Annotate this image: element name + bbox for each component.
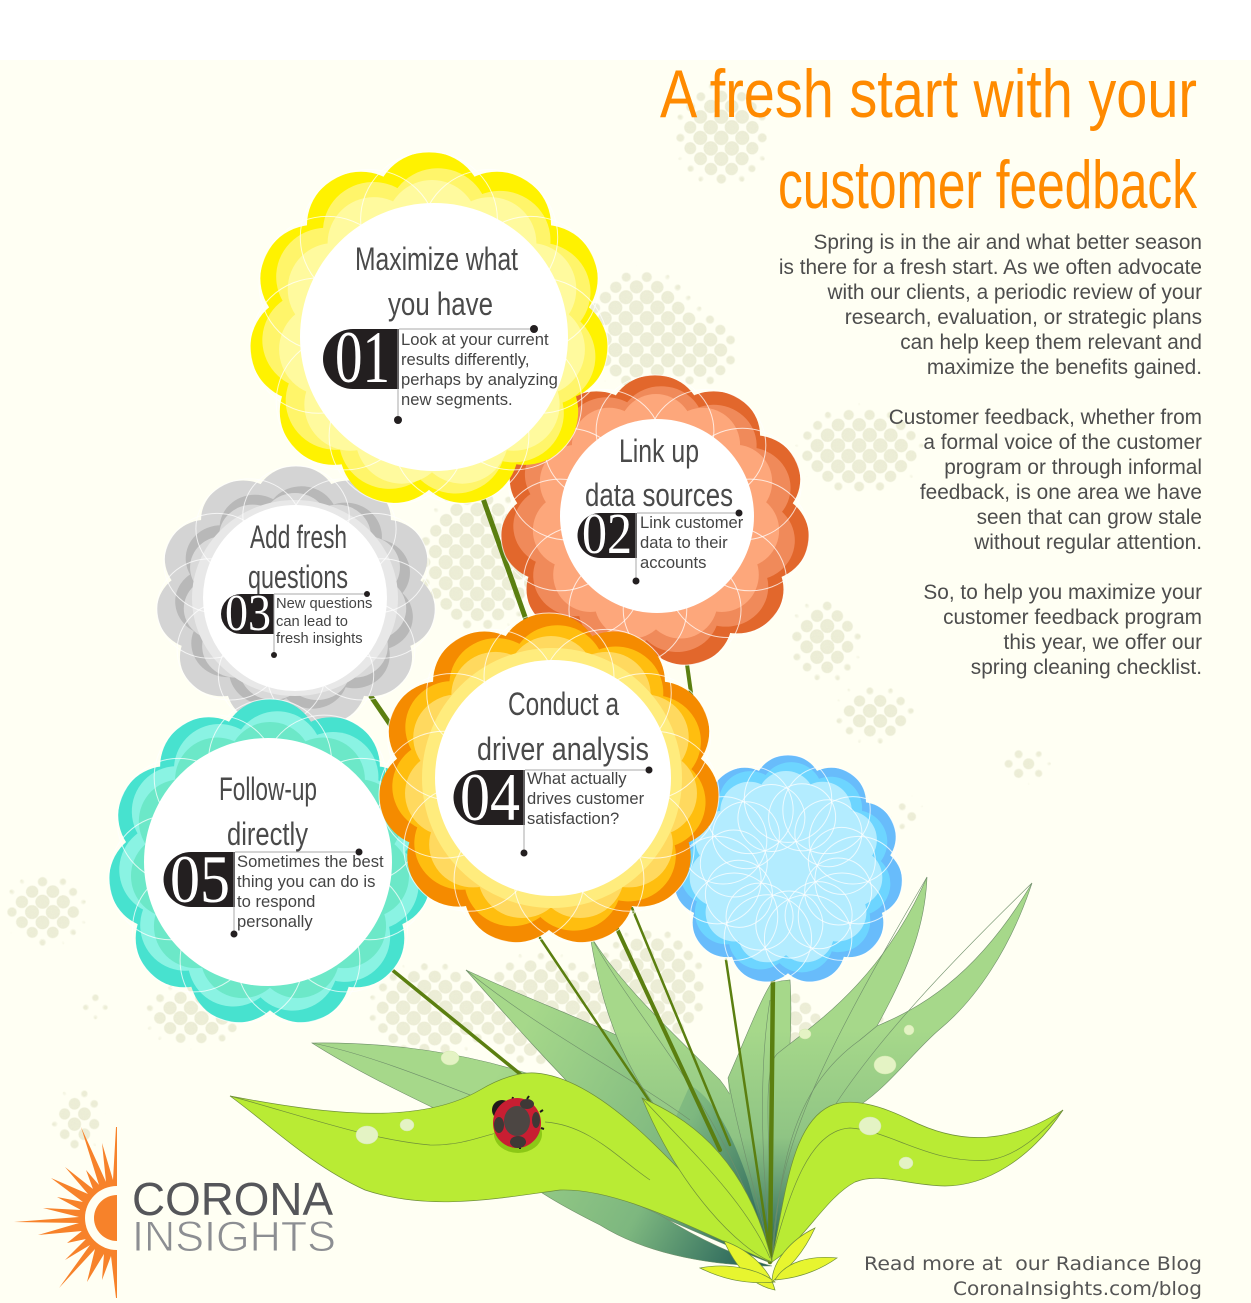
paragraph 3: So, to help you maximize your: [923, 581, 1202, 604]
number badge 01: 01: [335, 317, 390, 399]
paragraph 1: with our clients, a periodic review of your: [826, 281, 1202, 304]
paragraph 2: without regular attention.: [973, 531, 1202, 554]
illustration: back leaves: [312, 877, 1032, 1266]
description 01: Look at your current: [401, 330, 549, 349]
flower: blue empty bloom: [674, 755, 902, 982]
white disc 02: [560, 419, 754, 613]
description 02: accounts: [640, 553, 706, 572]
paragraph 3: [923, 581, 1202, 679]
paragraph 2: a formal voice of the customer: [923, 431, 1202, 454]
description 03: fresh insights: [276, 631, 363, 647]
number badge 04: 04: [460, 759, 520, 835]
connector 03: [271, 591, 370, 658]
description 01: results differently,: [401, 350, 530, 369]
description 02: data to their: [640, 533, 728, 552]
white disc 03: [203, 505, 387, 691]
paragraph 1: can help keep them relevant and: [900, 331, 1202, 354]
paragraph 2: Customer feedback, whether from: [889, 406, 1202, 429]
heading 05: [219, 771, 317, 852]
wordmark: CORONA: [132, 1173, 333, 1225]
connector 02: [632, 510, 742, 584]
number badge 05: 05: [170, 841, 230, 917]
logo: Corona Insights: [14, 1127, 336, 1298]
description 04: satisfaction?: [527, 809, 619, 828]
heading 05: Follow-up: [219, 771, 317, 807]
flower 04: Conduct a driver analysis: [379, 613, 719, 943]
heading 04: Conduct a: [508, 686, 619, 722]
paragraph 1: research, evaluation, or strategic plans: [845, 306, 1202, 329]
footer link: [864, 1253, 1202, 1300]
footer link: CoronaInsights.com/blog: [953, 1278, 1202, 1300]
description 03: [276, 596, 372, 647]
number badge 02: 02: [582, 501, 632, 566]
heading 03: questions: [248, 559, 348, 595]
description 04: drives customer: [527, 789, 645, 808]
intro text: [779, 231, 1202, 679]
heading 01: Maximize what: [355, 241, 518, 277]
footer link: Read more at our Radiance Blog: [864, 1253, 1202, 1275]
heading 05: directly: [227, 816, 308, 852]
top white band: [0, 0, 1251, 60]
flower 03: Add fresh questions: [157, 466, 435, 725]
description 05: [237, 852, 384, 931]
number badge 03: 03: [225, 585, 271, 642]
paragraph 2: [889, 406, 1202, 554]
description 04: [527, 769, 645, 828]
description 03: New questions: [276, 596, 372, 612]
heading 04: driver analysis: [477, 731, 649, 767]
paragraph 1: Spring is in the air and what better season: [814, 231, 1202, 254]
heading 02: [585, 433, 733, 513]
white disc 01: [300, 203, 568, 471]
description 02: Link customer: [640, 513, 744, 532]
icon: ladybug: [492, 1096, 544, 1153]
description 04: What actually: [527, 769, 627, 788]
description 05: thing you can do is: [237, 872, 375, 891]
wordmark: INSIGHTS: [132, 1213, 336, 1261]
flower 05: Follow-up directly: [109, 699, 431, 1023]
heading 02: Link up: [619, 433, 699, 469]
heading 01: [355, 241, 518, 322]
white disc 04: [435, 660, 671, 896]
paragraph 2: feedback, is one area we have: [920, 481, 1202, 504]
description 05: Sometimes the best: [237, 852, 384, 871]
flower 02: Link up data sources: [501, 375, 809, 665]
paragraph 1: [779, 231, 1202, 379]
icon: sun: [14, 1127, 117, 1298]
flower 01: Maximize what you have: [250, 152, 608, 504]
paragraph 1: is there for a fresh start. As we often advocate: [779, 256, 1202, 279]
paragraph 3: this year, we offer our: [1004, 631, 1202, 654]
description 01: [401, 330, 558, 409]
heading 01: you have: [388, 286, 493, 322]
title: [660, 56, 1198, 223]
heading 02: data sources: [585, 477, 733, 513]
white disc 05: [144, 738, 392, 986]
paragraph 2: seen that can grow stale: [977, 506, 1202, 529]
paragraph 1: maximize the benefits gained.: [927, 356, 1202, 379]
wordmark: [132, 1173, 336, 1261]
description 05: personally: [237, 912, 313, 931]
illustration: flower stems: [370, 490, 773, 1262]
paragraph 2: program or through informal: [944, 456, 1202, 479]
water droplets: [356, 1025, 914, 1169]
description 02: [640, 513, 744, 572]
illustration: bright front leaves: [230, 1073, 1063, 1290]
heading 03: Add fresh: [250, 519, 347, 555]
heading 04: [477, 686, 649, 767]
paragraph 3: spring cleaning checklist.: [971, 656, 1202, 679]
description 03: can lead to: [276, 614, 348, 630]
description 01: new segments.: [401, 390, 513, 409]
connector 04: [520, 766, 652, 856]
connector 01: [394, 325, 538, 424]
description 05: to respond: [237, 892, 315, 911]
description 01: perhaps by analyzing: [401, 370, 558, 389]
halftone background pattern: [7, 84, 1051, 1148]
paragraph 3: customer feedback program: [943, 606, 1202, 629]
connector 05: [230, 848, 362, 938]
heading 03: [248, 519, 348, 595]
